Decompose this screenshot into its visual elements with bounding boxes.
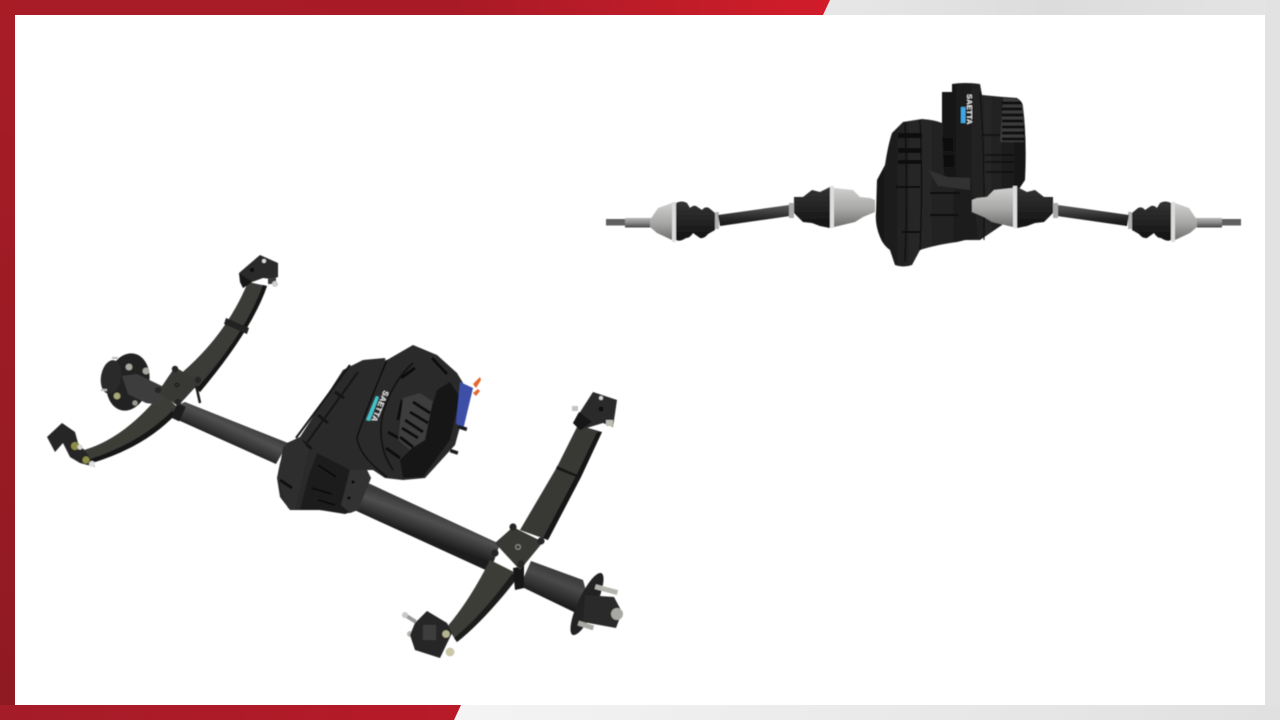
- frame: red top bar: [0, 0, 830, 15]
- frame: grey bottom bar: [450, 705, 1280, 720]
- icon: motor cooling fins: [1000, 98, 1024, 142]
- lower rear axle assembly with leaf springs: [47, 255, 623, 658]
- left axle stub: [122, 374, 170, 405]
- icon: motor cooling fins: [400, 402, 430, 447]
- right spring top bracket: [572, 392, 617, 430]
- right leaf spring lower section: [447, 560, 520, 642]
- motor housing: [345, 345, 466, 480]
- top e-axle assembly with half shafts: [606, 83, 1241, 266]
- blue connector with orange terminals: [450, 377, 481, 455]
- right half shaft: [972, 186, 1241, 242]
- left leaf spring lower section: [84, 392, 180, 463]
- right spring bottom bracket: [402, 611, 454, 658]
- main axle tube left: [170, 402, 288, 464]
- logo: SAETTA on motor: [961, 94, 974, 125]
- frame: grey top bar: [815, 0, 1280, 15]
- gearbox housing: [277, 358, 395, 514]
- main axle tube right: [350, 477, 500, 572]
- logo: SAETTA on motor: SAETTA: [369, 389, 390, 423]
- left wheel hub: [98, 349, 155, 415]
- right spring clamp plate: [491, 523, 545, 590]
- left leaf spring upper section: [178, 282, 267, 392]
- left spring bottom bracket: [47, 423, 95, 467]
- motor rear face: [400, 382, 460, 478]
- right leaf spring upper section: [520, 425, 602, 540]
- logo: SAETTA on motor: SAETTA: [965, 94, 974, 125]
- frame: grey right bar: [1265, 0, 1280, 720]
- left spring top bracket: [239, 255, 278, 288]
- motor housing: [942, 83, 1026, 240]
- left spring clamp plate: [155, 366, 201, 421]
- outer axle stub right: [520, 561, 590, 613]
- left half shaft: [606, 186, 875, 242]
- gearbox housing: [876, 119, 978, 266]
- frame: red bottom bar: [0, 705, 461, 720]
- frame: red left bar: [0, 0, 15, 720]
- right wheel hub: [564, 569, 623, 639]
